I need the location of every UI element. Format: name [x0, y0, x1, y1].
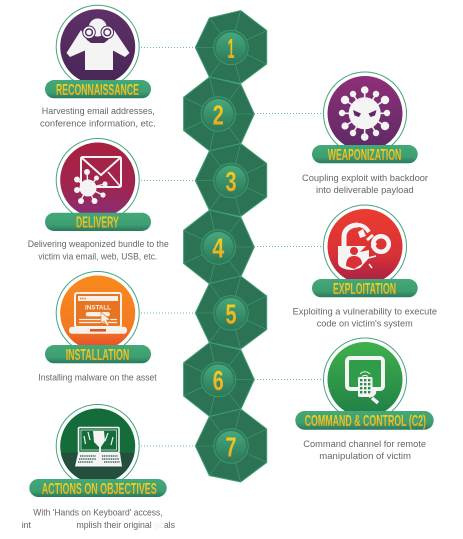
description: Coupling exploit with backdoor [302, 173, 428, 183]
icon: virus [339, 86, 390, 141]
icon: laptop with install screen: INSTALL [85, 306, 111, 312]
description [303, 439, 426, 461]
hexagon 1: 1 [228, 33, 234, 64]
central chain of numbered hexagons [184, 10, 267, 482]
connector lines [141, 48, 322, 446]
hexagon 5 [195, 276, 267, 349]
hexagon 1 [195, 10, 267, 84]
description [302, 173, 428, 195]
hexagon 7 [195, 409, 267, 482]
icon: person with binoculars [66, 18, 130, 70]
hexagon 7: 7 [226, 432, 236, 462]
description: conference information, etc. [40, 118, 156, 128]
hexagon 2 [184, 77, 254, 151]
description: into deliverable payload [316, 185, 414, 195]
heading pill: ACTIONS ON OBJECTIVES [42, 481, 157, 498]
panel: delivery [28, 138, 169, 262]
hexagon 6: 6 [213, 365, 224, 396]
icon: laptop with hand on keyboard [75, 428, 122, 466]
description: Harvesting email addresses, [42, 106, 155, 116]
description [293, 306, 437, 328]
description: Command channel for remote [303, 439, 426, 449]
icon: broken lock and key [338, 225, 389, 270]
hexagon 4 [184, 210, 254, 284]
panel: installation [38, 272, 157, 382]
panel: reconnaissance [40, 5, 156, 129]
description: code on victim's system [317, 318, 413, 328]
heading pill: WEAPONIZATION [328, 147, 401, 164]
icon: screen with remote control [347, 358, 383, 403]
description: manipulation of victim [319, 451, 411, 461]
description: Exploiting a vulnerability to execute [293, 306, 437, 316]
hexagon 3: 3 [226, 166, 236, 197]
panel: exploitation [293, 205, 437, 328]
heading pill [45, 213, 151, 232]
heading pill: EXPLOITATION [333, 281, 396, 298]
heading pill: RECONNAISSANCE [56, 82, 139, 99]
description [22, 508, 175, 530]
description [40, 106, 156, 128]
description: intruders accomplish their original goals [22, 520, 175, 530]
description: Installing malware on the asset [38, 372, 157, 382]
heading pill [29, 479, 167, 498]
description: With 'Hands on Keyboard' access, [33, 508, 163, 518]
hexagon 6 [184, 342, 254, 416]
description [28, 239, 169, 262]
icon: envelope with virus [74, 157, 121, 204]
hexagon 3 [195, 144, 267, 216]
heading pill [312, 279, 418, 298]
heading pill: INSTALLATION [66, 347, 129, 364]
hexagon 2: 2 [213, 100, 224, 130]
hexagon 4: 4 [212, 232, 225, 264]
hexagon 5: 5 [226, 298, 236, 330]
panel: weaponization [302, 72, 428, 195]
description: Delivering weaponized bundle to the [28, 239, 169, 249]
heading pill: DELIVERY [76, 214, 119, 232]
panel: actions on objectives [22, 404, 175, 530]
panel: command and control [295, 338, 434, 461]
description: victim via email, web, USB, etc. [38, 252, 157, 262]
